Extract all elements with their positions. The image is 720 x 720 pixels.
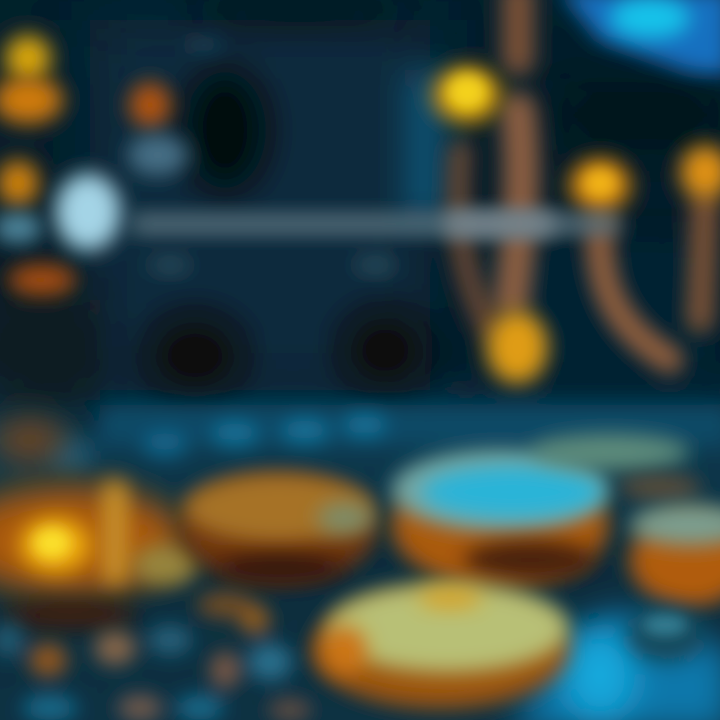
yellow lights	[0, 36, 720, 383]
horizon row of blue dots	[46, 405, 720, 469]
coin pile left	[0, 418, 197, 629]
top right blue shape	[560, 0, 720, 75]
background: arches and walls	[0, 0, 720, 400]
lower coin pale green	[312, 584, 720, 720]
hanging brown strands	[458, 0, 705, 360]
foreground small coins	[0, 593, 312, 720]
coin middle brown	[180, 474, 376, 584]
coin far right	[530, 434, 720, 606]
coin right cyan	[392, 450, 608, 587]
pale blue circle and blur band	[0, 37, 620, 273]
